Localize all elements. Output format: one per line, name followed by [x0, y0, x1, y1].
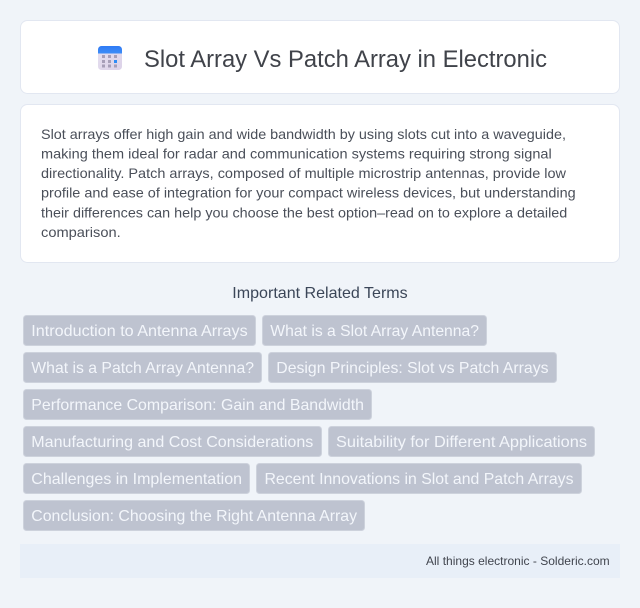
tag: conclusion [24, 500, 364, 530]
tag: recent innovations: Recent Innovations in Slot and Patch Arrays [264, 471, 574, 488]
tag: design principles: Design Principles: Slot vs Patch Arrays [276, 360, 548, 377]
tag: patch array antenna [24, 352, 262, 382]
tag: challenges [24, 464, 250, 494]
tag: design principles [268, 352, 556, 382]
text block: description [41, 126, 576, 240]
text block: description: profile and ease of integration for your compact wireless devices, but understanding [41, 185, 576, 201]
tag: patch array antenna: What is a Patch Array Antenna? [31, 360, 254, 377]
text block: description: comparison. [41, 224, 121, 240]
panel: header [20, 20, 620, 94]
tag: conclusion: Conclusion: Choosing the Right Antenna Array [31, 508, 357, 525]
heading: important related terms: Important Related Terms [232, 285, 408, 302]
tag: introduction: Introduction to Antenna Arrays [31, 323, 248, 340]
tag list: related terms [24, 316, 594, 530]
tag: manufacturing and cost: Manufacturing and Cost Considerations [31, 434, 313, 451]
tag: challenges: Challenges in Implementation [31, 471, 242, 488]
tag: suitability [328, 426, 594, 456]
tag: suitability: Suitability for Different Applications [336, 434, 587, 451]
title: Slot Array Vs Patch Array in Electronic [144, 46, 547, 73]
tag: performance comparison: Performance Comparison: Gain and Bandwidth [31, 397, 364, 414]
text block: description: their differences can help you choose the best option–read on to explore a detailed [41, 204, 567, 220]
icon: calendar grid [98, 46, 122, 70]
tag: slot array antenna: What is a Slot Array Antenna? [270, 323, 479, 340]
text block: description: Slot arrays offer high gain and wide bandwidth by using slots cut into a waveguide, [41, 126, 566, 142]
footer text: All things electronic - Solderic.com [426, 554, 610, 568]
text block: description: directionality. Patch arrays, composed of multiple microstrip antennas, provide low [41, 165, 567, 181]
footer [20, 544, 620, 578]
tag: performance comparison [24, 390, 372, 420]
tag: introduction [24, 316, 256, 346]
tag: slot array antenna [262, 316, 486, 346]
panel: description [20, 104, 620, 262]
text block: description: making them ideal for radar and communication systems requiring strong signal [41, 146, 552, 162]
tag: manufacturing and cost [24, 426, 322, 456]
tag: recent innovations [256, 464, 582, 494]
